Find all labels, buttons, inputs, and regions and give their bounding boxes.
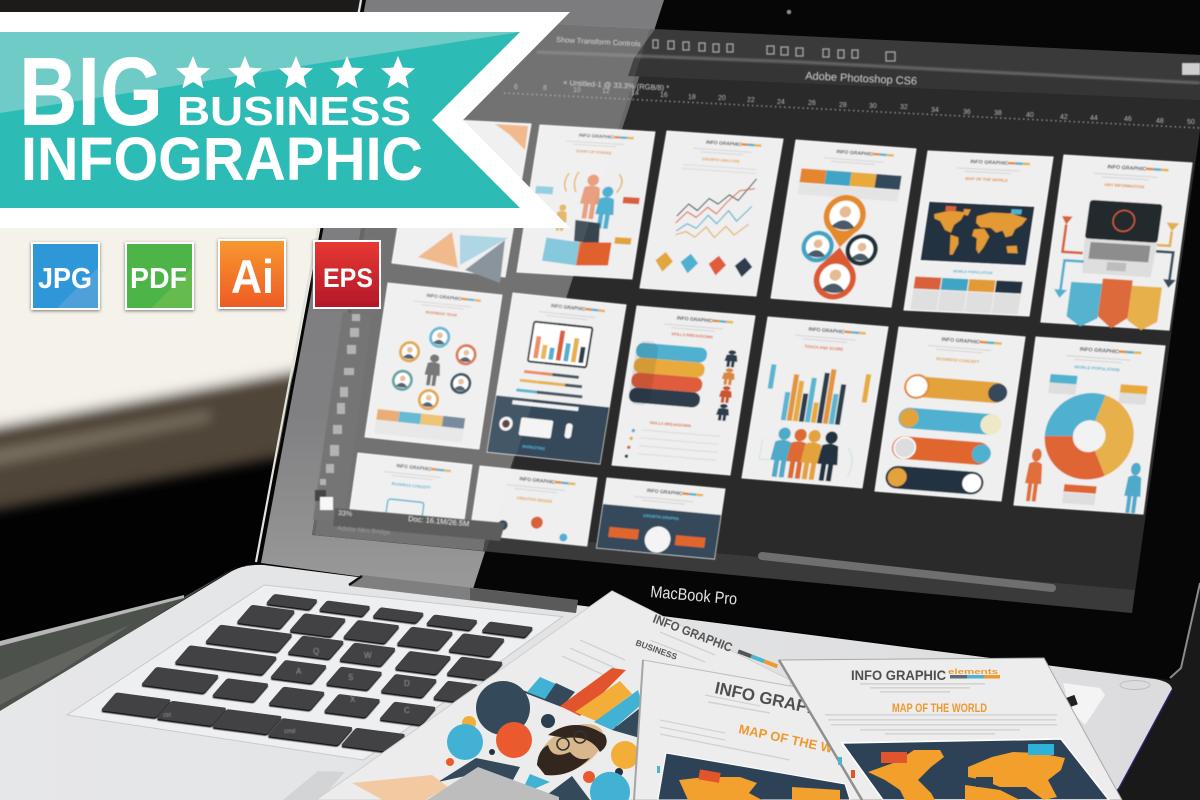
- thumbnail: line chart: GROWTH ANALYSIS: [702, 156, 740, 164]
- bottom triangles: [438, 758, 520, 782]
- key legends: [163, 647, 410, 735]
- bezel reflection glare: [261, 0, 664, 592]
- thumbnail: laptop bar chart with dark footer: [487, 293, 626, 464]
- key legends: ctrl: [163, 713, 171, 719]
- title accent: elements: [948, 667, 998, 676]
- thumbnail: laptop and arrows: INFO GRAPHIC: [1107, 164, 1147, 173]
- icon: EPS file format: [314, 241, 380, 308]
- ruler numbers: 48: [1156, 118, 1164, 125]
- laptop base: [0, 565, 1172, 800]
- hinge strip: [349, 575, 578, 613]
- thumbnail: team pinwheel: INFO GRAPHIC: [836, 149, 874, 158]
- thumbnail: start-up figures: START UP STAGES: [576, 149, 612, 155]
- paper: map of the world (front): [779, 658, 1122, 800]
- background: right dark surface: [1100, 580, 1200, 800]
- right triangle: [540, 776, 590, 800]
- keyboard: [67, 585, 563, 760]
- body lines: [660, 695, 790, 760]
- status bar: Doc: 16.1M/26.5M: [408, 514, 470, 528]
- gray shadow shape: [427, 767, 559, 800]
- camera: [787, 10, 791, 14]
- base lip near right: [1063, 683, 1105, 725]
- photoshop interface text and ruler: [504, 35, 1200, 128]
- ruler numbers: 36: [963, 109, 971, 116]
- left tools panel: [313, 312, 372, 522]
- screen glare region: [312, 17, 655, 551]
- map tag blue: [1028, 744, 1054, 755]
- icon: JPG file format: JPG: [38, 263, 92, 295]
- paper left edge shadow: [779, 660, 862, 800]
- thumbnail: bars and silhouettes: TOUCH AND SCORE: [804, 344, 844, 352]
- ruler numbers: 44: [1090, 115, 1098, 122]
- template thumbnails on screen: [348, 118, 1192, 559]
- thumbnail: third row left: BUSINESS CONCEPT: [391, 481, 432, 490]
- ruler ticks: [504, 93, 1200, 128]
- thumbnail: laptop and arrows: [1041, 155, 1192, 332]
- ruler numbers: 38: [994, 110, 1002, 117]
- sheet subheading: BUSINESS: [634, 637, 679, 662]
- circle icons: [446, 681, 639, 800]
- sheet title: INFO GRAPHIC: [851, 667, 946, 683]
- ruler numbers: 22: [747, 97, 755, 104]
- thumbnail: banner pills: BUSINESS CONCEPT: [936, 356, 980, 364]
- photoshop options bar: [634, 29, 1200, 84]
- shelf: [512, 687, 640, 736]
- options label: Show Transform Controls: [556, 35, 641, 48]
- thumbnail: laptop bar chart with dark footer: MARKETING: [522, 444, 546, 451]
- side markers: [838, 757, 855, 778]
- ruler numbers: [514, 84, 1195, 126]
- background: black room base: [0, 0, 420, 800]
- thumbnail: people circle: INFO GRAPHIC: [426, 293, 462, 302]
- thumbnail: donut chart: INFO GRAPHIC: [1079, 347, 1119, 355]
- right port mark: [1066, 695, 1078, 707]
- thumbnail: start-up figures: [517, 125, 655, 279]
- ruler numbers: 46: [1124, 116, 1132, 123]
- thumbnail: stacked pills and people: INFO GRAPHIC: [676, 315, 713, 324]
- bearded man avatar: [520, 714, 612, 795]
- map panel: [658, 753, 850, 800]
- thumbnail: third row middle: CREATIVE DESIGN: [516, 495, 553, 504]
- laptop lid: [256, 0, 1200, 680]
- title tricolor bar: [737, 649, 778, 668]
- ruler numbers: 40: [1026, 112, 1034, 119]
- thumbnail: line chart: INFO GRAPHIC: [705, 140, 742, 148]
- essentials button: [1182, 63, 1200, 75]
- thumbnail: donut chart: WORLD POPULATION: [1074, 364, 1120, 372]
- thumbnail: banner pills: [875, 327, 1025, 501]
- thumbnail: start-up figures: INFO GRAPHIC: [578, 133, 615, 141]
- paper left edge: [634, 660, 643, 800]
- heading INFOGRAPHIC: INFOGRAPHIC: [21, 125, 423, 193]
- reflection streak: [537, 52, 1200, 83]
- photoshop title band: [628, 58, 1200, 100]
- glare over the left of the screen: [315, 18, 650, 551]
- sheet title: INFO GRAPHIC: [713, 678, 838, 723]
- thumbnail: world map: INFO GRAPHIC: [970, 159, 1009, 167]
- icon: PDF file format: PDF: [130, 263, 187, 295]
- scrollbar: [762, 556, 1052, 588]
- document tab: × Untitled-1 @ 33.3% (RGB/8) *: [563, 78, 669, 93]
- hinge dark right: [470, 588, 578, 613]
- thumbnail: stacked pills and people: SKILLS BREAKDOWN: [649, 420, 691, 428]
- thumbnail: world map: MAP OF THE WORLD: [965, 176, 1008, 183]
- thumbnail: stacked pills and people: [612, 306, 755, 475]
- key legends: W: [364, 651, 372, 660]
- keyboard well: [67, 585, 563, 760]
- key legends: Q: [313, 647, 319, 656]
- thumbnail: world map: [904, 151, 1053, 316]
- status bar: 33%: [338, 510, 352, 518]
- ruler numbers: 28: [839, 102, 847, 109]
- sheet heading: MAP OF THE WORLD: [737, 721, 870, 764]
- map tag: [698, 769, 721, 783]
- key legends: cmd: [284, 729, 295, 735]
- sheet body text lines: [562, 632, 715, 676]
- continents: [868, 750, 1065, 800]
- ruler numbers: 6: [514, 84, 518, 91]
- key legends: S: [348, 673, 353, 682]
- heading BIG: BIG: [19, 37, 163, 146]
- key legends: A: [296, 667, 302, 676]
- ruler numbers: 20: [718, 95, 726, 102]
- ruler numbers: 34: [931, 107, 939, 114]
- paper: business infographic sheet (back): [316, 591, 800, 800]
- icon: Ai file format: [219, 240, 285, 308]
- thumbnail: bars and silhouettes: [742, 317, 888, 488]
- thumbnail: third row middle: INFO GRAPHIC: [519, 476, 556, 486]
- ruler numbers: 12: [602, 88, 610, 95]
- sheet title: INFO GRAPHIC: [651, 612, 734, 655]
- key legends: D: [404, 679, 410, 688]
- status bar: [333, 508, 505, 541]
- key legends: C: [404, 706, 410, 715]
- thumbnail: third row left: [348, 453, 472, 532]
- logo oval: [1120, 680, 1150, 690]
- ribbon white outline: [0, 12, 570, 228]
- ruler numbers: 10: [573, 87, 581, 94]
- side markers: [657, 766, 660, 773]
- thumbnail: bars and silhouettes: INFO GRAPHIC: [808, 327, 846, 336]
- thumbnail: third row right: [596, 478, 725, 559]
- ruler numbers: 18: [688, 94, 696, 101]
- keys: [101, 594, 534, 752]
- MacBook Pro label: MacBook Pro: [650, 583, 738, 609]
- key legends: X: [350, 695, 356, 704]
- thumbnail: line chart: [640, 131, 783, 296]
- trackpad: [283, 771, 345, 800]
- title banner: [0, 12, 570, 228]
- application title: Adobe Photoshop CS6: [805, 70, 917, 88]
- ruler numbers: 16: [660, 92, 668, 99]
- map tag red: [881, 752, 907, 763]
- background: dark top strip: [0, 0, 420, 14]
- thumbnail: people circle: [365, 283, 502, 449]
- peach sheet corner: [352, 775, 448, 800]
- ruler numbers: 30: [869, 103, 877, 110]
- city buildings: [527, 668, 642, 738]
- icon: EPS file format: EPS: [323, 263, 373, 293]
- heading BUSINESS: BUSINESS: [177, 88, 411, 134]
- ruler numbers: 26: [808, 100, 816, 107]
- thumbnail: third row middle: [470, 466, 597, 546]
- thumbnail: people circle: BUSINESS TEAM: [425, 310, 457, 318]
- five stars: [176, 56, 415, 88]
- screen: [312, 17, 1200, 613]
- status bar: Adobe Mini Bridge: [337, 525, 391, 537]
- sheet heading: MAP OF THE WORLD: [892, 703, 987, 715]
- thumbnail: third row right: INFO GRAPHIC: [646, 488, 683, 497]
- tricolor bar: [950, 675, 1000, 678]
- thumbnail: stacked pills and people: SKILLS BREAKDOWN: [671, 331, 713, 340]
- ribbon highlight: [0, 32, 520, 113]
- ruler numbers: 42: [1060, 114, 1068, 121]
- continents: [679, 777, 840, 800]
- thumbnail: laptop bar chart with dark footer: INFO GRAPHIC: [550, 303, 586, 313]
- ruler numbers: 32: [900, 104, 908, 111]
- ruler numbers: 14: [631, 90, 639, 97]
- option icons: [653, 40, 895, 61]
- icon: JPG file format: [32, 243, 99, 309]
- ribbon teal: [0, 32, 520, 208]
- thumbnail: banner pills: INFO GRAPHIC: [941, 337, 980, 346]
- ruler numbers: 24: [777, 99, 785, 106]
- thumbnail: third row right: GROWTH GRAPHS: [643, 513, 680, 521]
- lid rim highlight: [256, 0, 361, 562]
- subtitle lines: [860, 683, 985, 693]
- thumbnail: third row left: INFO GRAPHIC: [396, 463, 432, 473]
- paper: map of the world (middle): [634, 660, 915, 800]
- background: ground and table edge: [0, 565, 240, 712]
- lid right rim: [1170, 583, 1200, 678]
- background: cream wall and blurred brown table: [0, 0, 450, 515]
- base right edge: [1118, 690, 1172, 790]
- map tag dark: [976, 777, 993, 787]
- body text lines: [825, 714, 1057, 735]
- thumbnail: world map: WORLD POPULATION: [953, 269, 993, 275]
- icon: Ai file format: Ai: [231, 250, 274, 303]
- ruler numbers: 8: [543, 85, 547, 92]
- thumbnail: laptop and arrows: ANY INFORMATION: [1104, 182, 1145, 189]
- hinge notch: [349, 576, 362, 585]
- thumbnail: triangles partly behind banner: [392, 118, 531, 283]
- map panel: [842, 739, 1109, 800]
- thumbnail: team pinwheel: [771, 140, 916, 307]
- icon: PDF file format: [126, 243, 193, 309]
- thumbnail: donut chart: [1014, 337, 1165, 514]
- scroll strip: [483, 533, 1135, 613]
- ruler numbers: 50: [1187, 119, 1195, 126]
